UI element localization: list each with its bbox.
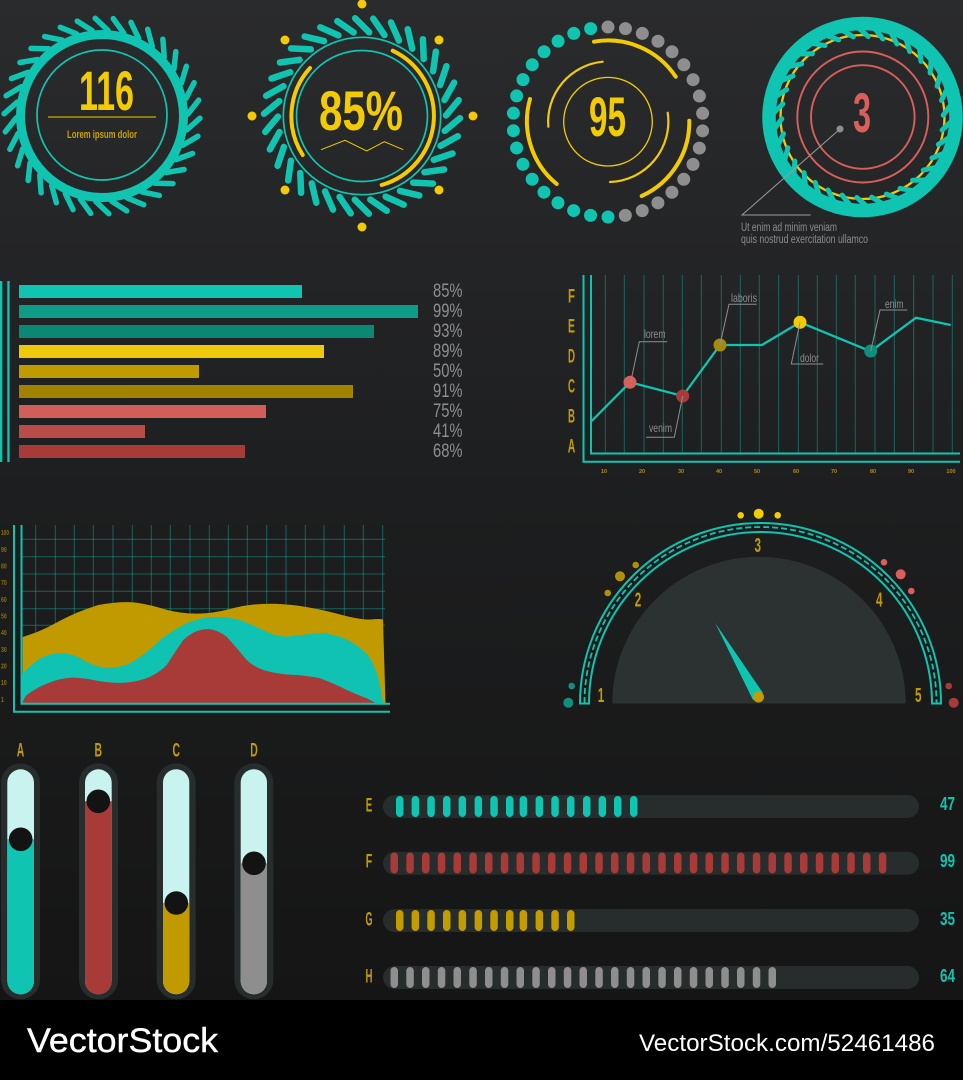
slider B: B	[95, 741, 102, 762]
y axis numbers: 90	[1, 547, 7, 554]
thin arcs	[548, 62, 668, 182]
vertical grid	[605, 275, 952, 453]
y axis letters: C	[568, 376, 575, 398]
dashed track	[584, 527, 936, 703]
bar F: F	[366, 852, 372, 872]
dial band	[580, 523, 941, 704]
dot ring	[513, 27, 703, 217]
y axis letters: A	[568, 436, 575, 458]
y axis letters: E	[568, 316, 575, 338]
value 3: 3	[853, 81, 871, 144]
callout labels	[644, 291, 904, 435]
y axis numbers: 100	[1, 530, 9, 537]
outer ring with ticks	[769, 24, 956, 210]
x axis numbers: 70	[831, 469, 837, 475]
radial ticks	[257, 11, 467, 221]
footer url: VectorStock.com/52461486	[639, 1030, 935, 1057]
axes	[584, 275, 960, 462]
x axis numbers: 20	[639, 469, 645, 475]
needle hub	[753, 692, 764, 702]
percentage labels: 99%	[433, 301, 463, 322]
bar H	[366, 966, 955, 989]
y axis letters: B	[568, 406, 575, 428]
percentage labels: 50%	[433, 361, 463, 382]
y axis numbers	[1, 530, 9, 704]
bar E: E	[366, 796, 372, 816]
bar E: 47	[940, 794, 955, 814]
red rings	[797, 52, 928, 182]
toothed ring	[0, 11, 207, 221]
dial numbers	[598, 535, 922, 707]
gauge: 116	[0, 11, 207, 221]
value 85%: 85%	[319, 79, 403, 142]
sparkline	[321, 140, 403, 151]
slider A	[1, 741, 40, 999]
bar G	[366, 909, 955, 932]
y axis numbers: 70	[1, 580, 7, 587]
grid	[22, 525, 385, 704]
thick arcs	[527, 40, 689, 196]
slider A: A	[17, 741, 24, 762]
y axis letters: F	[568, 286, 575, 308]
x axis numbers: 100	[946, 469, 956, 475]
gauge: 85%	[248, 0, 478, 232]
yellow arcs	[291, 51, 434, 185]
percentage labels	[433, 281, 463, 462]
y axis numbers: 30	[1, 647, 7, 654]
bar G: G	[366, 910, 372, 930]
axis lines	[0, 281, 10, 462]
percentage labels: 75%	[433, 401, 463, 422]
progress bars	[366, 794, 955, 989]
y axis letters	[568, 286, 575, 458]
callout lines	[631, 304, 907, 437]
bar G: 35	[940, 909, 955, 929]
x axis numbers: 30	[678, 469, 684, 475]
footer band	[0, 1000, 963, 1080]
red area	[23, 629, 377, 704]
divider line	[48, 116, 156, 118]
y axis numbers: 10	[1, 680, 7, 687]
percentage labels: 91%	[433, 381, 463, 402]
dial face	[612, 557, 906, 704]
bar H: 64	[940, 966, 955, 986]
double ring	[283, 37, 441, 195]
value 116: 116	[79, 59, 134, 122]
y axis numbers: 1	[1, 697, 4, 704]
bar E	[366, 794, 955, 818]
value 95: 95	[589, 85, 626, 148]
data line	[592, 318, 951, 421]
gauge: 3	[741, 24, 956, 246]
percentage labels: 93%	[433, 321, 463, 342]
note line 2: quis nostrud exercitation ullamco	[741, 234, 868, 246]
yellow compass dots	[248, 0, 478, 232]
dial numbers: 4	[876, 590, 883, 612]
axes	[14, 525, 390, 712]
teal area	[22, 617, 383, 704]
note line 1: Ut enim ad minim veniam	[741, 222, 837, 234]
x axis numbers: 90	[908, 469, 914, 475]
dot clusters	[563, 509, 959, 708]
slider C	[157, 741, 196, 999]
y axis numbers: 50	[1, 614, 7, 620]
y axis numbers: 60	[1, 597, 7, 604]
horizontal bar chart	[0, 281, 463, 462]
slider D	[234, 741, 273, 999]
line chart	[568, 275, 960, 475]
dial numbers: 1	[598, 685, 604, 707]
footer logo: VectorStock	[27, 1022, 219, 1060]
needle	[715, 623, 763, 700]
bar H: H	[366, 966, 372, 988]
leader line	[742, 126, 844, 215]
bars	[19, 285, 418, 458]
gauge: 95	[513, 27, 703, 217]
x axis numbers: 50	[754, 469, 760, 475]
callout labels: venim	[649, 421, 672, 435]
y axis letters: D	[568, 346, 575, 368]
y axis numbers: 80	[1, 564, 7, 570]
y axis numbers: 20	[1, 664, 7, 670]
x axis numbers: 80	[870, 469, 876, 475]
inner circle	[37, 50, 167, 180]
dial numbers: 3	[754, 535, 761, 557]
vertical sliders	[1, 741, 273, 999]
bar F	[366, 851, 955, 875]
data points	[624, 316, 877, 402]
slider B	[79, 741, 118, 999]
slider C: C	[173, 741, 180, 762]
x axis numbers: 40	[716, 469, 722, 475]
yellow ring	[780, 35, 944, 199]
semicircle dial	[563, 509, 959, 708]
dial numbers: 5	[915, 685, 922, 707]
inner circle	[564, 77, 652, 166]
area chart	[1, 525, 390, 712]
percentage labels: 85%	[433, 281, 463, 302]
x axis numbers	[601, 469, 956, 475]
slider D: D	[250, 741, 258, 762]
percentage labels: 68%	[433, 441, 463, 462]
callout labels: enim	[885, 297, 904, 311]
bar F: 99	[940, 851, 955, 871]
percentage labels: 41%	[433, 421, 463, 442]
x axis numbers: 60	[793, 469, 799, 475]
callout labels: dolor	[800, 351, 819, 365]
x axis numbers: 10	[601, 469, 607, 475]
callout labels: laboris	[731, 291, 757, 305]
percentage labels: 89%	[433, 341, 463, 362]
dial numbers: 2	[635, 590, 641, 612]
y axis numbers: 40	[1, 630, 7, 637]
caption: Lorem ipsum dolor	[67, 129, 138, 141]
gold area	[23, 602, 385, 704]
callout labels: lorem	[644, 327, 666, 341]
